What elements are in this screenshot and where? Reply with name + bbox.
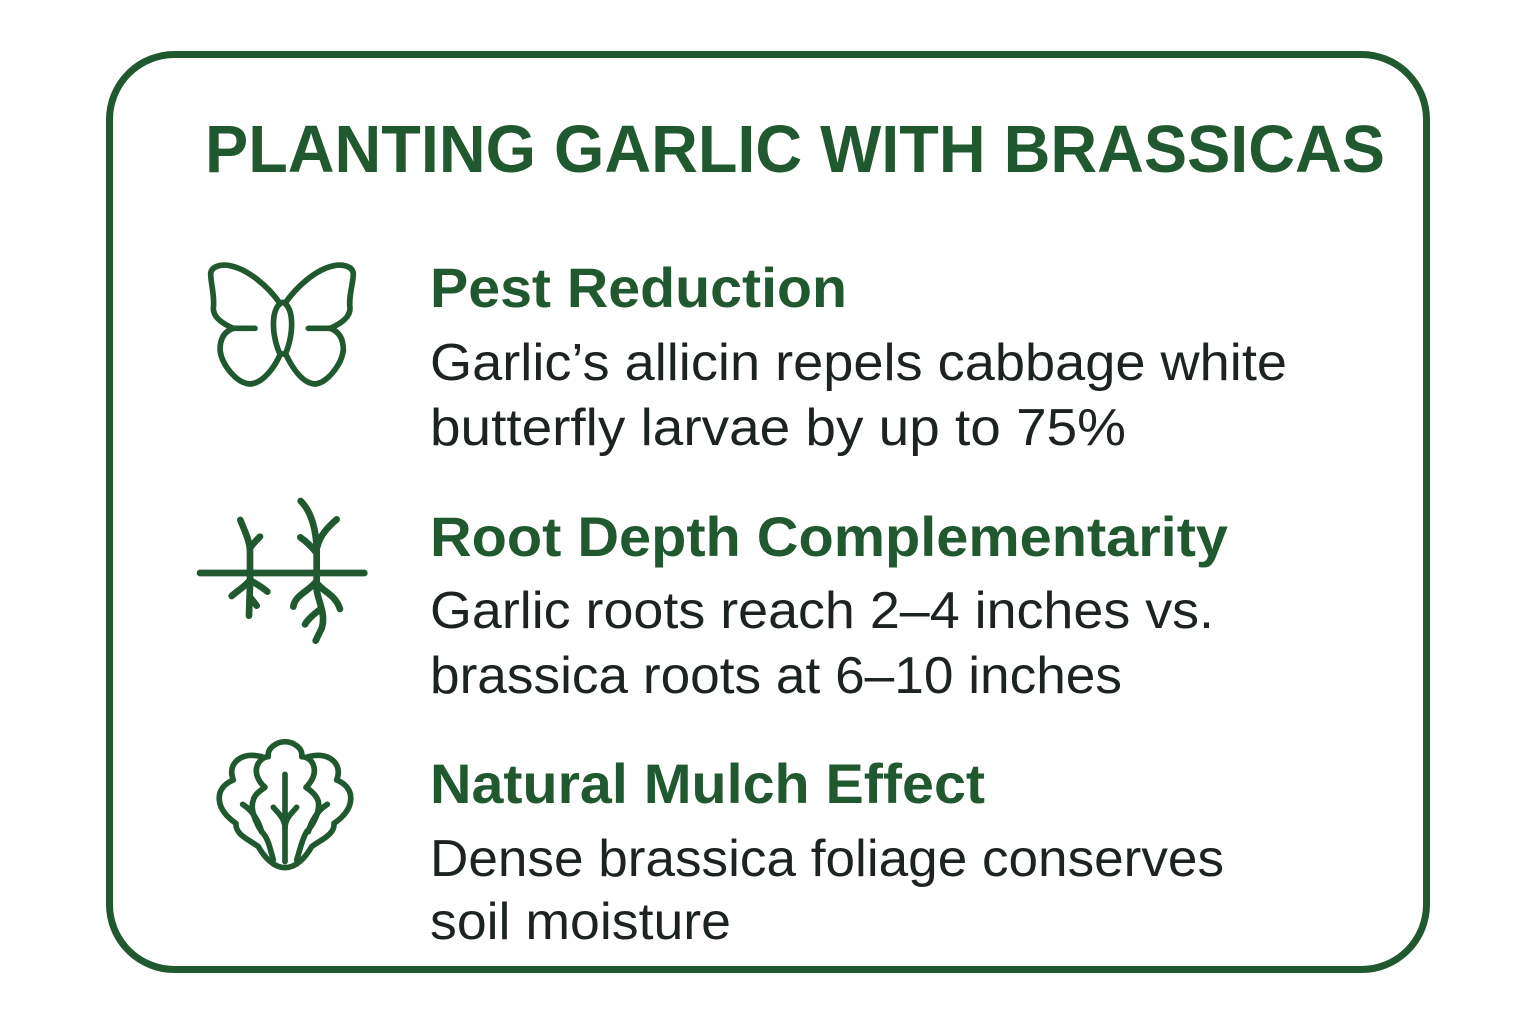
section: root depth complementarity: [200, 501, 1228, 705]
text: root depth description: brassica roots at 6–10 inches: [430, 647, 1122, 705]
text: natural mulch description: soil moisture: [430, 893, 731, 951]
section: pest reduction: [211, 256, 1287, 457]
icon: brassica leaf: [219, 742, 351, 868]
text: pest reduction description: [430, 334, 1287, 457]
text: pest reduction description: butterfly larvae by up to 75%: [430, 399, 1126, 457]
text: root depth description: [430, 582, 1214, 705]
icon: butterfly: [211, 265, 353, 384]
text: natural mulch description: Dense brassica foliage conserves: [430, 830, 1224, 888]
heading: pest reduction: Pest Reduction: [430, 256, 847, 319]
text: root depth description: Garlic roots reach 2–4 inches vs.: [430, 582, 1214, 640]
icon: roots: [200, 501, 364, 641]
heading: natural mulch effect: Natural Mulch Effect: [430, 752, 985, 815]
text: pest reduction description: Garlic’s allicin repels cabbage white: [430, 334, 1287, 392]
heading: root depth complementarity: Root Depth Complementarity: [430, 505, 1228, 568]
panel: rounded frame: [110, 54, 1426, 970]
title: PLANTING GARLIC WITH BRASSICAS: [205, 112, 1385, 187]
text: natural mulch description: [430, 830, 1224, 951]
section: natural mulch effect: [219, 742, 1224, 951]
